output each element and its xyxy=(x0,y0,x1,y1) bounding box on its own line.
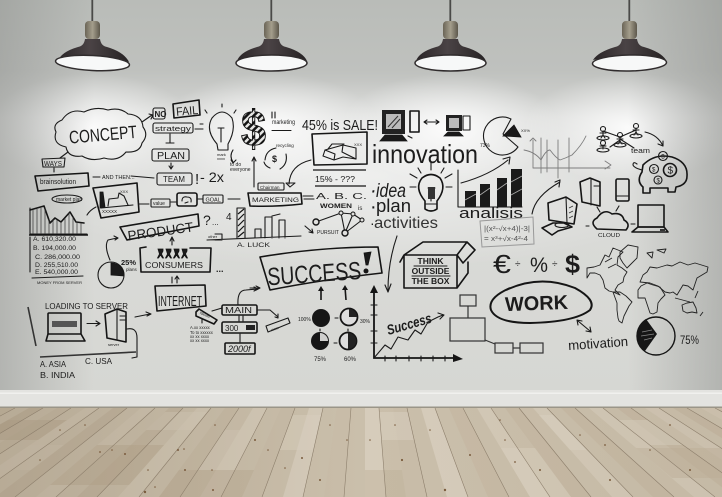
arrow down xyxy=(385,236,397,292)
formula box: = x³+√x-4²-4 xyxy=(484,235,528,243)
product box: ? xyxy=(203,212,211,228)
success line graph: Success xyxy=(385,310,434,338)
regions line and list: B. INDIA xyxy=(40,370,75,380)
goal box: GOAL xyxy=(206,198,221,204)
cloud: CLOUD xyxy=(598,233,620,239)
dollar sign: everyone xyxy=(230,167,251,173)
network diagram: WOMEN xyxy=(320,204,352,210)
laptop xyxy=(46,313,100,341)
no box: NO xyxy=(154,110,166,119)
cloud xyxy=(586,206,635,239)
idea plan activities list: idea xyxy=(376,181,406,202)
regions line and list xyxy=(40,352,136,380)
and then label: AND THEN... xyxy=(102,175,135,181)
lightbulb small xyxy=(200,104,236,161)
formula box: |(x²-√x+4)|-3| xyxy=(484,225,530,233)
piggy bank: $ xyxy=(652,168,656,174)
analysis bar chart: analisis xyxy=(459,205,523,222)
idea plan activities list: · xyxy=(370,215,375,231)
account table: MONEY FROM SERVER xyxy=(37,280,82,285)
idea plan activities list: · xyxy=(370,180,377,202)
percentage circles xyxy=(298,308,371,363)
piggy bank xyxy=(633,152,687,193)
account table: B. 194,000.00 xyxy=(33,245,76,252)
consumers bracket: CONSUMERS xyxy=(145,261,203,270)
small oval xyxy=(52,195,82,203)
pie 25 percent xyxy=(98,236,138,288)
small bar chart: A. LUCK xyxy=(237,243,270,249)
screen chart box: XXXXX xyxy=(102,209,117,214)
pie chart top right xyxy=(480,117,530,155)
product box: PRODUCT xyxy=(127,219,194,243)
innovation word: innovation xyxy=(372,139,478,169)
arrow from chart to screen xyxy=(87,204,149,215)
percent question lines xyxy=(313,170,367,201)
marketing note: marketing xyxy=(272,119,295,126)
currency equation: ÷ xyxy=(552,259,558,270)
idea plan activities list: activities xyxy=(374,215,438,232)
mobile phone xyxy=(616,179,629,201)
team people xyxy=(597,124,663,155)
percent question lines: 15% - ??? xyxy=(315,175,356,184)
and then label xyxy=(93,175,154,181)
percentage circles: 75% xyxy=(314,357,327,363)
goal box xyxy=(203,195,223,204)
pie chart top right: XX% xyxy=(521,128,530,133)
lamp 3 xyxy=(415,0,486,71)
two way arrow xyxy=(424,120,439,124)
formula box xyxy=(480,217,534,247)
chairman box xyxy=(252,157,284,190)
small pill xyxy=(257,310,290,332)
faint line chart xyxy=(524,136,611,178)
tower computer xyxy=(580,178,600,206)
laptop right xyxy=(632,205,668,232)
small oval: market plan xyxy=(56,197,82,203)
main flow group: 2000f xyxy=(227,344,252,354)
loading to server label: LOADING TO SERVER xyxy=(45,302,128,311)
dollar cycle: $ xyxy=(272,154,277,164)
brainsolution box xyxy=(35,173,89,191)
ways box xyxy=(42,152,68,172)
pie chart 75 percent: 75% xyxy=(680,333,699,347)
main flow group: xx xx xxxx xyxy=(190,334,210,339)
pie screen box: XXX xyxy=(354,142,362,147)
fail box: FAIL xyxy=(176,103,199,119)
dollar cycle: recycling xyxy=(276,143,294,148)
wall background xyxy=(0,0,722,392)
consumers bracket: ... xyxy=(216,264,224,274)
internet box: INTERNET xyxy=(158,293,202,310)
piggy bank: $ xyxy=(668,166,674,176)
main flow group: xx xx xxxx xyxy=(190,338,210,343)
main flow group: ideas xyxy=(199,310,212,319)
work ellipse: WORK xyxy=(505,292,569,316)
pie chart 75 percent xyxy=(637,317,699,355)
regions line and list: C. USA xyxy=(85,357,113,366)
percentage circles: 30% xyxy=(360,319,371,325)
network diagram: is xyxy=(358,206,362,212)
small bar chart xyxy=(207,208,301,249)
chairman box: Chairman xyxy=(260,185,280,190)
idea plan activities list: plan xyxy=(376,196,411,216)
world map xyxy=(587,245,708,323)
product box: 4 xyxy=(226,212,232,223)
exclamation two times: ! xyxy=(195,171,199,188)
piggy bank: $ xyxy=(661,154,665,160)
strategy box: strategy xyxy=(155,124,191,133)
idea plan activities list: · xyxy=(370,196,377,218)
lightbulb small: mark xyxy=(217,152,226,157)
product box xyxy=(120,212,232,243)
lamp 1 xyxy=(55,0,130,72)
plan box: PLAN xyxy=(157,151,185,162)
percent question lines: A. B. C. xyxy=(316,192,367,201)
upward arrows xyxy=(318,285,348,300)
currency equation: ÷ xyxy=(515,259,521,270)
curved arrow to monitor xyxy=(532,180,560,214)
baseboard xyxy=(0,390,722,408)
main flow group xyxy=(190,287,258,354)
screen chart box: XXX xyxy=(120,189,128,194)
flow diagram xyxy=(450,295,543,353)
dollar sign: to do xyxy=(230,162,241,168)
success line graph xyxy=(370,285,463,362)
screen chart box xyxy=(93,183,139,218)
ways box: WAYS xyxy=(44,161,62,168)
brainsolution box: brainsolution xyxy=(40,179,76,186)
network diagram xyxy=(305,204,364,236)
value box xyxy=(151,199,170,207)
dollar sign: $ xyxy=(241,101,266,157)
currency equation: % xyxy=(530,254,548,277)
lamp 4 xyxy=(592,0,667,72)
consumers bracket xyxy=(140,237,224,274)
account table xyxy=(30,236,83,285)
small pill: xxxx xyxy=(270,325,279,332)
currency equation: $ xyxy=(565,249,581,279)
cloud box xyxy=(171,193,203,206)
small bar chart: other xyxy=(208,234,218,239)
concept to no arrow xyxy=(142,114,153,122)
pie 25 percent: 25% xyxy=(121,258,136,267)
computer small xyxy=(444,115,470,136)
dollar sign xyxy=(230,101,266,173)
analysis bar chart xyxy=(458,157,523,222)
exclamation two times: - 2x xyxy=(200,169,224,185)
currency equation xyxy=(493,249,581,279)
percentage circles: 60% xyxy=(344,357,357,363)
server: server xyxy=(108,342,120,347)
exclamation two times xyxy=(195,169,224,188)
currency equation: € xyxy=(493,249,512,279)
network diagram: PURSUIT xyxy=(317,230,339,236)
strategy box xyxy=(153,123,203,143)
lightbulb small: xxxx xyxy=(217,156,225,161)
product box: ... xyxy=(212,218,219,227)
main flow group: MAIN xyxy=(225,306,252,315)
concept cloud: CONCEPT xyxy=(68,122,138,148)
concept cloud xyxy=(55,108,146,160)
think outside the box: OUTSIDE xyxy=(412,266,450,276)
piggy bank: $ xyxy=(656,178,660,184)
lamp 2 xyxy=(236,0,307,71)
main flow group: 300 xyxy=(225,324,239,333)
double arrow to motivation xyxy=(577,320,591,332)
arrow to success box from left xyxy=(250,286,260,290)
percentage circles: 100% xyxy=(298,317,311,323)
think outside the box xyxy=(400,242,475,288)
marketing note xyxy=(272,112,295,130)
marketing box: MARKETING xyxy=(252,197,299,204)
pie screen box xyxy=(286,132,367,187)
computer large xyxy=(380,110,419,141)
internet box xyxy=(155,276,206,311)
pie 25 percent: plans xyxy=(126,267,138,272)
server xyxy=(105,309,151,358)
team people: team xyxy=(631,146,650,155)
desktop monitor xyxy=(542,197,577,235)
success box: SUCCESS xyxy=(266,257,362,291)
main flow group: A.xx xxxxx xyxy=(190,325,211,330)
account table: E. 540,000.00 xyxy=(35,269,78,276)
plan box xyxy=(152,149,189,169)
pie chart top right: 73% xyxy=(480,143,491,149)
account table: A. 610,320.00 xyxy=(33,236,76,243)
think outside the box: THINK xyxy=(418,256,444,266)
think outside the box: THE BOX xyxy=(412,276,450,286)
pen stroke xyxy=(28,307,36,346)
account table: D. 255,510.00 xyxy=(35,262,78,269)
work ellipse xyxy=(490,281,592,323)
idea plan activities list xyxy=(370,180,438,232)
motivation word: motivation xyxy=(568,334,629,353)
regions line and list: A. ASIA xyxy=(40,359,66,369)
sale headline: 45% is SALE! xyxy=(302,117,378,134)
main flow group: To to xxxxxx xyxy=(190,330,214,335)
lightbulb large xyxy=(410,163,452,211)
area chart xyxy=(29,206,88,235)
wooden floor xyxy=(0,408,722,497)
dollar cycle xyxy=(264,143,294,169)
team box: TEAM xyxy=(163,175,185,184)
value box: value xyxy=(153,201,165,207)
team box xyxy=(157,173,192,185)
marketing box xyxy=(228,193,314,206)
account table: C. 286,000.00 xyxy=(35,254,80,261)
